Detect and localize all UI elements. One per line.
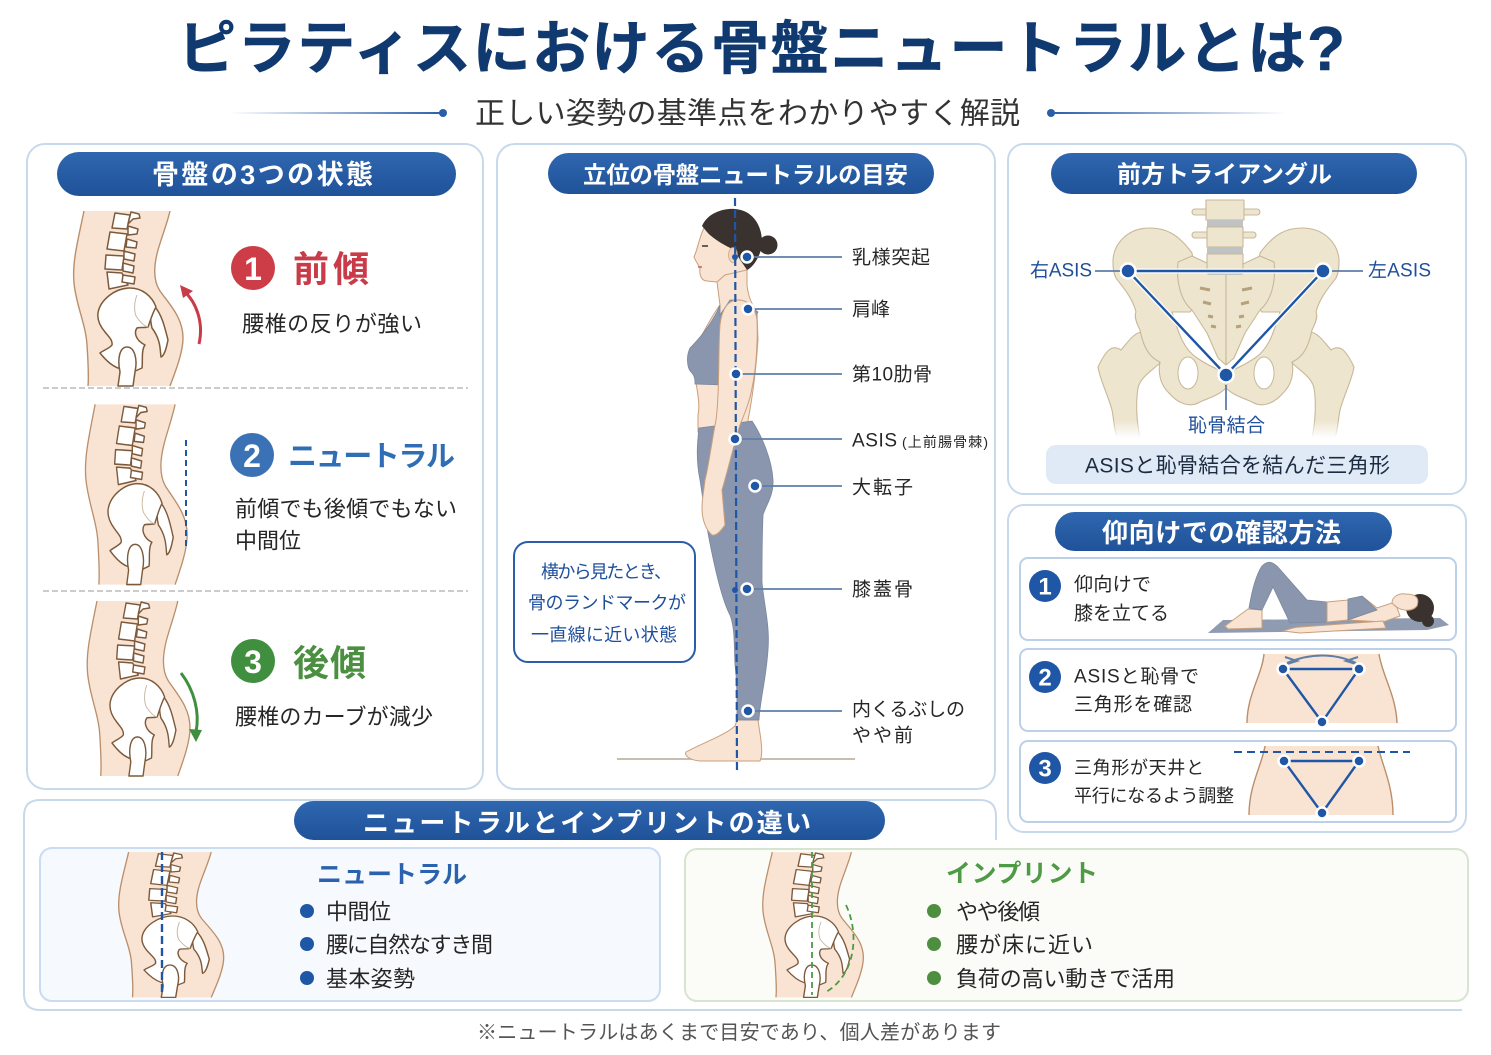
subtitle with side rules: 正しい姿勢の基準点をわかりやすく解説: [475, 98, 1020, 130]
heading pill: supine: 仰向けでの確認方法: [1102, 518, 1341, 548]
callout: 一直線: [514, 542, 695, 662]
step 1: 1: [1038, 574, 1052, 600]
badge 1 red: 1: [244, 251, 262, 287]
heading pill: triangle: [1051, 153, 1417, 194]
step 3: 3: [1038, 756, 1052, 782]
label: ニュートラル: ニュートラル: [288, 441, 455, 473]
triangle: ASIS to pubic symphysis: [1095, 264, 1363, 410]
badge 1 red: [231, 246, 275, 290]
step 3: 平行になるよう調整: [1074, 786, 1234, 806]
badge 3 green: 3: [244, 644, 262, 680]
landmark: 膝蓋骨: 膝蓋骨: [852, 578, 913, 600]
landmark: 膝蓋骨: [732, 578, 913, 600]
step 1: 仰向けで: [1074, 574, 1151, 596]
list: neutral: 腰に自然なすき間: [326, 932, 493, 958]
list: neutral: 中間位: [326, 900, 391, 924]
description: posterior: 腰椎のカーブが減少: [235, 704, 433, 730]
callout: 一直線: 骨のランドマークが: [528, 593, 686, 613]
panel: ニュートラルとインプリントの違い: [24, 800, 1468, 1010]
illustration: imprint pelvis: [763, 852, 863, 997]
illustration: front pelvis bones: [1095, 200, 1355, 438]
plumb line: standing: [735, 198, 737, 773]
landmark: 大転子: [750, 476, 913, 498]
heading pill: standing: 立位の骨盤ニュートラルの目安: [583, 162, 908, 188]
heading pill: pelvic states: 骨盤の3つの状態: [152, 160, 373, 190]
label: 後傾: 後傾: [293, 642, 366, 684]
landmark: 内くるぶしのやや前: [742, 698, 965, 746]
illustration: posterior tilt: [87, 601, 190, 776]
caption: ASISと恥骨結合を結んだ三角形: [1085, 454, 1390, 478]
heading pill: supine: [1055, 512, 1392, 551]
caption: [1046, 445, 1428, 484]
step 1: 膝を立てる: [1074, 602, 1169, 624]
callout: 一直線: 一直線に近い状態: [531, 625, 677, 645]
illustration: anterior tilt: [74, 211, 183, 386]
landmark: 第10肋骨: 第10肋骨: [852, 364, 932, 386]
heading pill: comparison: ニュートラルとインプリントの違い: [363, 808, 811, 838]
illustration: neutral pelvis: [119, 852, 224, 997]
landmark: ASIS: [730, 430, 988, 452]
figure: standing woman in profile: [617, 209, 855, 761]
list: imprint: [927, 900, 1175, 992]
landmark: 乳様突起: 乳様突起: [852, 246, 930, 268]
sub-panel: imprint: [685, 849, 1468, 1001]
step 2: 三角形を確認: [1074, 694, 1192, 716]
step 2: [1020, 649, 1456, 731]
panel: 骨盤の3つの状態: [27, 144, 483, 789]
illustration: abdomen level with ceiling: [1234, 746, 1410, 818]
plumb line: neutral: [185, 440, 187, 546]
heading: neutral: ニュートラル: [317, 861, 467, 889]
heading pill: pelvic states: [57, 152, 456, 196]
landmark: 第10肋骨: [730, 364, 932, 386]
labels: ASIS: [1030, 260, 1431, 436]
landmark: 肩峰: [742, 298, 890, 320]
labels: ASIS: 恥骨結合: [1188, 414, 1265, 436]
badge 2 blue: 2: [243, 438, 261, 474]
landmark: 肩峰: 肩峰: [852, 298, 890, 320]
badge 3 green: [231, 639, 275, 683]
illustration: neutral: [85, 404, 187, 585]
description: anterior: 腰椎の反りが強い: [242, 312, 422, 336]
sub-panel: neutral: [40, 848, 660, 1001]
list: imprint: 腰が床に近い: [956, 932, 1093, 958]
panel: 立位の骨盤ニュートラルの目安: [497, 144, 995, 789]
labels: ASIS: 右ASIS: [1030, 260, 1092, 282]
list: imprint: やや後傾: [956, 900, 1040, 924]
footnote: ※ニュートラルはあくまで目安であり、個人差があります: [477, 1021, 1001, 1044]
landmark: ASIS: (上前腸骨棘): [902, 434, 988, 450]
step 1: [1020, 558, 1456, 640]
description: neutral: 中間位: [235, 528, 301, 554]
landmark: 大転子: 大転子: [852, 476, 913, 498]
illustration: abdomen with triangle: [1247, 654, 1397, 728]
heading: imprint: インプリント: [946, 860, 1098, 888]
panel: 前方トライアングル: [1008, 144, 1466, 494]
landmark: 乳様突起: [732, 246, 930, 268]
list: neutral: [300, 900, 493, 992]
description: neutral: [235, 496, 457, 554]
heading pill: standing: [548, 153, 934, 194]
arrow: anterior tilt: [180, 285, 201, 344]
labels: ASIS: 左ASIS: [1368, 260, 1431, 282]
subtitle with side rules: [230, 98, 1286, 130]
list: imprint: 負荷の高い動きで活用: [956, 966, 1175, 992]
heading pill: triangle: 前方トライアングル: [1117, 160, 1332, 188]
step 3: [1020, 741, 1456, 822]
badge 2 blue: [230, 433, 274, 477]
label: 前傾: 前傾: [293, 248, 369, 290]
title: ピラティスにおける骨盤ニュートラルとは?: [178, 14, 1345, 84]
landmark: 内くるぶしのやや前: やや前: [852, 724, 913, 746]
step 2: 2: [1038, 664, 1052, 692]
panel: 仰向けでの確認方法: [1008, 505, 1466, 832]
description: neutral: 前傾でも後傾でもない: [235, 496, 457, 522]
list: neutral: 基本姿勢: [326, 966, 415, 992]
callout: 一直線: 横から見たとき、: [541, 562, 672, 582]
step 2: ASISと恥骨で: [1074, 666, 1199, 688]
landmark: 内くるぶしのやや前: 内くるぶしの: [852, 698, 965, 720]
landmark: ASIS: ASIS: [852, 430, 897, 452]
illustration: woman lying with knees bent: [1208, 562, 1449, 633]
arrow: posterior tilt: [181, 673, 202, 742]
heading pill: comparison: [294, 801, 885, 840]
step 3: 三角形が天井と: [1074, 758, 1204, 778]
